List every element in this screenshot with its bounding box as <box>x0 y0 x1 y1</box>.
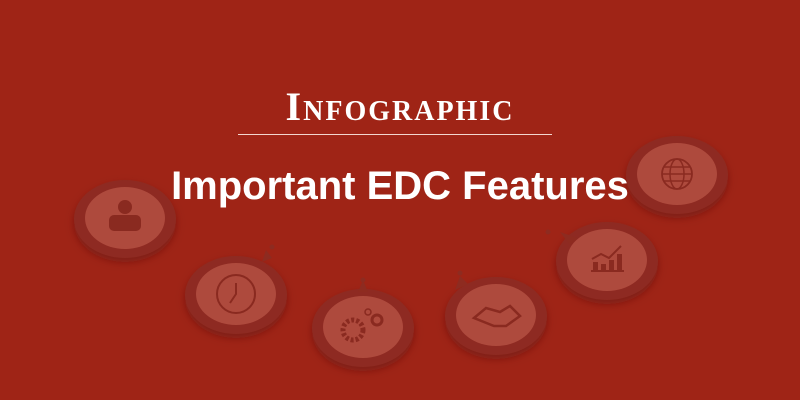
circle 1: person <box>74 180 176 258</box>
circle 5: chart <box>546 222 658 300</box>
circle 2: clock <box>185 244 287 334</box>
circle 3: gears <box>312 278 414 367</box>
circle 4: handshake <box>445 270 547 355</box>
heading: Infographic: Infographic <box>286 84 514 129</box>
circle 6: globe <box>626 136 728 214</box>
title: Important EDC Features: Important EDC Features <box>171 164 629 208</box>
